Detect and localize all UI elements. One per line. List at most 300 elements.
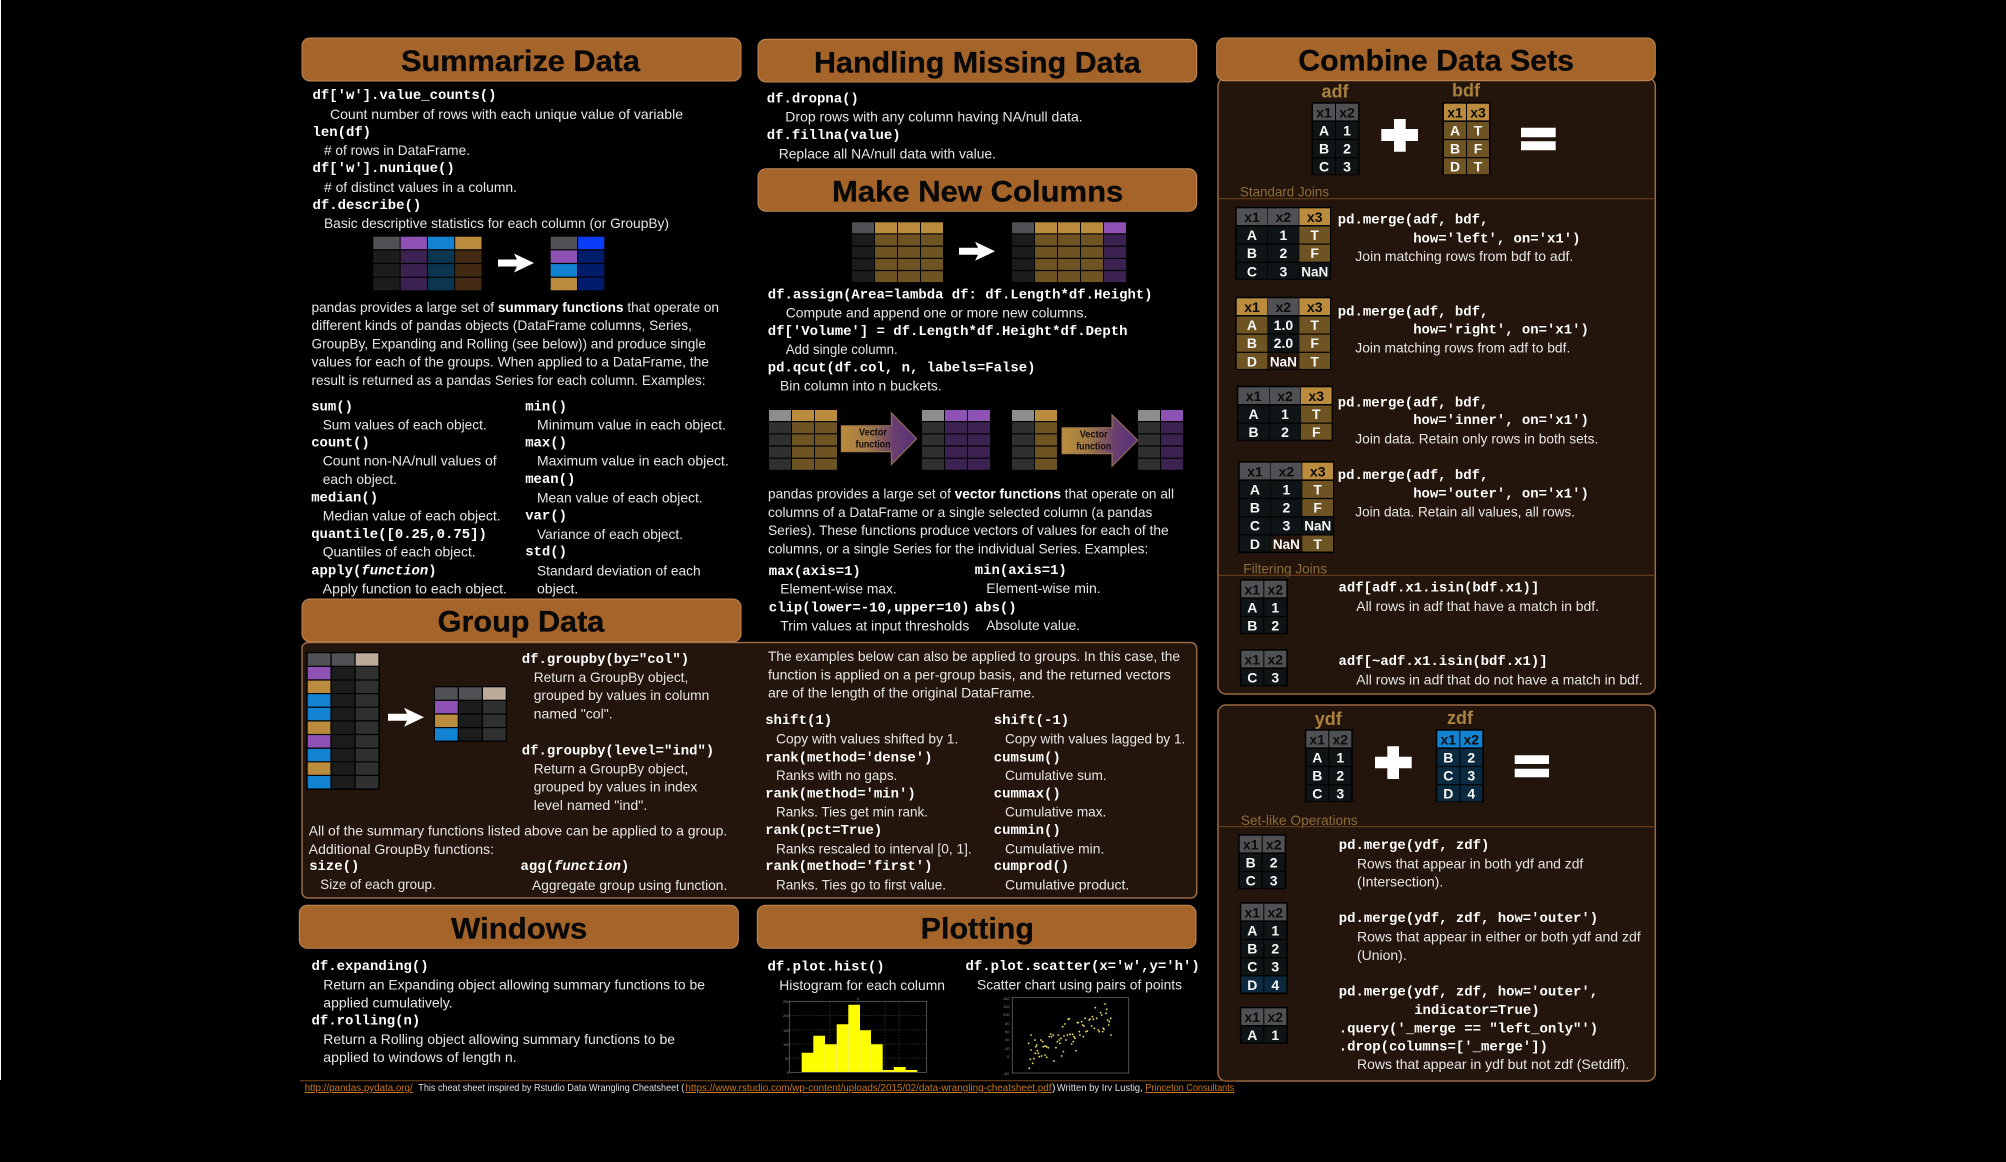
table: ydf: x1 xyxy=(1310,731,1325,747)
filter join: isin xyxy=(1240,579,1599,634)
panel: Windows xyxy=(299,905,738,1065)
table: zdf xyxy=(1436,708,1484,802)
join: outer: T xyxy=(1313,536,1322,552)
table: bdf: T xyxy=(1474,122,1483,138)
text block: shift and rank functions: shift(1) xyxy=(765,713,832,729)
heading: Plotting: Plotting xyxy=(921,912,1034,945)
join: outer: x3 xyxy=(1310,463,1326,479)
diagram: describe table transformation xyxy=(373,237,605,290)
table: zdf: zdf xyxy=(1447,708,1474,728)
text block: shift and rank functions: Copy with values shifted by 1. xyxy=(776,730,958,746)
join: left: 2 xyxy=(1280,245,1288,261)
panel: Handling Missing Data xyxy=(758,39,1197,161)
table: ydf: C xyxy=(1312,786,1322,802)
text block: window methods: applied cumulatively. xyxy=(323,994,453,1010)
text block: plot methods: Scatter chart using pairs of points xyxy=(977,977,1182,993)
table: bdf: B xyxy=(1450,140,1460,156)
join: inner: 2 xyxy=(1281,424,1289,440)
join: outer xyxy=(1238,461,1589,553)
text block: missing data methods xyxy=(767,91,1083,161)
table: ydf: 3 xyxy=(1336,786,1344,802)
table: adf: x2 xyxy=(1339,104,1355,120)
text block: plot methods xyxy=(768,959,1200,993)
set operation: intersection: x1 xyxy=(1243,836,1259,852)
text block: window methods: df.expanding() xyxy=(312,959,429,975)
panel: Plotting xyxy=(757,905,1200,1076)
heading: Group Data: Group Data xyxy=(438,606,605,639)
join: right: B xyxy=(1247,335,1257,351)
set operation: union: 1 xyxy=(1271,922,1279,938)
heading: Handling Missing Data: Handling Missing Data xyxy=(814,46,1141,79)
table: adf: 2 xyxy=(1343,140,1351,156)
text block: summary functions left column: Quantiles of each object. xyxy=(323,544,476,560)
set operation: intersection: (Intersection). xyxy=(1357,874,1443,890)
join: left: A xyxy=(1247,227,1257,243)
filter join: not isin: All rows in adf that do not have a match in bdf. xyxy=(1356,671,1643,687)
set operation: setdiff: indicator=True) xyxy=(1414,1003,1540,1019)
table: bdf: T xyxy=(1474,159,1483,175)
text block: window methods xyxy=(312,959,705,1065)
text block: window methods: Return an Expanding object allowing summary functions to be xyxy=(323,976,705,992)
text block: summary functions right column: Standard deviation of each xyxy=(537,562,701,578)
join: right: T xyxy=(1310,353,1319,369)
footer credits xyxy=(300,1081,1236,1094)
text block: additional groupby functions: Additional GroupBy functions: xyxy=(309,841,494,857)
table: ydf: 2 xyxy=(1336,768,1344,784)
text block: vector function examples: max(axis=1) xyxy=(769,564,861,580)
join: left: how='left', on='x1') xyxy=(1413,231,1580,247)
heading: Make New Columns xyxy=(758,169,1197,211)
footer credits: Written by Irv Lustig, xyxy=(1057,1082,1143,1094)
table: adf: x1 xyxy=(1316,104,1332,120)
text block: new column methods: pd.qcut(df.col, n, labels=False) xyxy=(768,360,1035,376)
table: adf: A xyxy=(1319,122,1329,138)
text block: summary functions intro: different kinds of pandas objects (DataFrame columns, Series, xyxy=(312,317,692,333)
text block: summary functions intro: result is returned as a pandas Series for each column. Examples: xyxy=(312,372,706,388)
text block: groupby methods: df.groupby(by="col") xyxy=(522,652,689,668)
set operation: setdiff xyxy=(1240,984,1629,1072)
set operation: intersection: C xyxy=(1246,873,1256,889)
filter join: not isin: adf[~adf.x1.isin(bdf.x1)] xyxy=(1338,654,1548,670)
text block: plot methods: df.plot.scatter(x='w',y='h') xyxy=(966,959,1200,975)
join: inner: x3 xyxy=(1309,388,1324,404)
text block: vector function examples: clip(lower=-10,upper=10) xyxy=(769,600,970,616)
text block: cumulative functions: Cumulative sum. xyxy=(1005,767,1107,783)
arrow: vector function: Vector xyxy=(859,427,887,439)
set operation: setdiff: Rows that appear in ydf but not zdf (Setdiff). xyxy=(1357,1056,1629,1072)
join: left: x1 xyxy=(1244,209,1260,225)
text block: vector functions intro xyxy=(768,486,1174,556)
chart: scatter plot: 80 xyxy=(1005,1021,1010,1026)
table: ydf: x2 xyxy=(1333,731,1348,747)
table: bdf: A xyxy=(1450,122,1460,138)
text block: summary functions intro: pandas provides a large set of summary functions that operate on xyxy=(312,299,719,315)
text block: vector function examples: Absolute value. xyxy=(986,617,1080,633)
filter join: isin: x1 xyxy=(1245,581,1260,597)
join: right: F xyxy=(1310,335,1319,351)
text block: cumulative functions: cummax() xyxy=(994,786,1061,802)
join: left xyxy=(1235,207,1580,280)
join: left: B xyxy=(1247,245,1257,261)
text block: new column methods: Add single column. xyxy=(786,341,898,357)
set operation: union: 4 xyxy=(1271,977,1279,993)
text block: new column methods xyxy=(768,287,1153,394)
join: outer: A xyxy=(1250,481,1260,497)
section label: Set-like Operations: Set-like Operations xyxy=(1241,812,1358,828)
chart: scatter plot: 100 xyxy=(1003,1012,1010,1017)
text block: missing data methods: Replace all NA/null data with value. xyxy=(779,145,996,161)
text block: summary functions intro: values for each of the groups. When applied to a DataFrame, the xyxy=(312,354,709,370)
text block: summary functions right column: mean() xyxy=(525,472,575,488)
footer credits: This cheat sheet inspired by Rstudio Data Wrangling Cheatsheet ( xyxy=(418,1082,685,1094)
set operation: union: x2 xyxy=(1268,904,1283,920)
text block: cumulative functions: cummin() xyxy=(994,823,1061,839)
set operation: union: x1 xyxy=(1245,904,1260,920)
set operation: union: A xyxy=(1247,922,1257,938)
filter join: not isin: x1 xyxy=(1245,651,1260,667)
chart: scatter plot: 0 xyxy=(1007,1054,1010,1059)
text block: additional groupby functions: Aggregate group using function. xyxy=(532,877,727,893)
text block: summary functions left column: apply(function) xyxy=(311,563,437,579)
join: inner: how='inner', on='x1') xyxy=(1413,413,1589,429)
join: outer: pd.merge(adf, bdf, xyxy=(1338,468,1488,484)
text block: shift and rank functions: Ranks with no gaps. xyxy=(776,767,897,783)
text block: shift and rank functions: rank(method='dense') xyxy=(765,750,932,766)
join: right: D xyxy=(1247,353,1257,369)
set operation: union: Rows that appear in either or both ydf and zdf xyxy=(1357,929,1641,945)
join: left: x2 xyxy=(1276,209,1291,225)
text block: summary functions left column: Median value of each object. xyxy=(323,507,501,523)
text block: vector function examples: Element-wise min. xyxy=(986,580,1101,596)
join: outer: x2 xyxy=(1279,463,1294,479)
footer credits: http://pandas.pydata.org/ xyxy=(305,1082,413,1094)
text block: summary functions right column: min() xyxy=(525,400,567,416)
filter join: isin: 2 xyxy=(1271,618,1279,634)
set operation: intersection: 2 xyxy=(1270,854,1278,870)
panel: Summarize Data xyxy=(302,38,741,596)
text block: summary functions right column: Variance of each object. xyxy=(537,526,683,542)
chart: scatter plot: 140 xyxy=(1003,996,1010,1001)
join: outer: D xyxy=(1250,536,1260,552)
text block: window methods: df.rolling(n) xyxy=(312,1014,420,1030)
table: zdf: x1 xyxy=(1441,731,1456,747)
text block: summary functions left column: each object. xyxy=(323,471,397,487)
filter join: not isin: 3 xyxy=(1271,669,1279,685)
join: left: C xyxy=(1247,263,1257,279)
chart: histogram xyxy=(783,996,927,1075)
text block: summarize functions list: len(df) xyxy=(312,125,371,141)
text block: groupby methods xyxy=(522,652,714,813)
table: adf xyxy=(1312,82,1360,175)
table: adf: 3 xyxy=(1343,159,1351,175)
set operation: intersection: pd.merge(ydf, zdf) xyxy=(1339,838,1489,854)
table: bdf: D xyxy=(1450,159,1460,175)
text block: new column methods: Bin column into n buckets. xyxy=(780,378,942,394)
text block: shift and rank functions: Ranks. Ties go to first value. xyxy=(776,876,946,892)
set operation: setdiff: pd.merge(ydf, zdf, how='outer', xyxy=(1339,984,1598,1000)
join: inner: 1 xyxy=(1281,406,1289,422)
text block: per-group vector intro xyxy=(768,648,1180,700)
text block: summarize functions list: # of rows in DataFrame. xyxy=(324,142,470,158)
text block: groupby methods: df.groupby(level="ind") xyxy=(522,743,714,759)
join: inner: pd.merge(adf, bdf, xyxy=(1338,395,1488,411)
heading: Combine Data Sets: Combine Data Sets xyxy=(1298,45,1574,78)
set operation: setdiff: .drop(columns=['_merge']) xyxy=(1339,1039,1548,1055)
text block: vector function examples: Element-wise max. xyxy=(780,581,897,597)
text block: new column methods: df.assign(Area=lambda df: df.Length*df.Height) xyxy=(768,287,1153,303)
filter join: isin: adf[adf.x1.isin(bdf.x1)] xyxy=(1338,581,1539,597)
join: inner: B xyxy=(1249,424,1259,440)
icon: equals xyxy=(1521,128,1556,150)
text block: summary functions right column xyxy=(525,400,729,596)
table: ydf: A xyxy=(1312,749,1322,765)
text block: cumulative functions: shift(-1) xyxy=(994,713,1069,729)
chart: scatter plot: 20 xyxy=(1005,1046,1010,1051)
join: outer: C xyxy=(1250,518,1260,534)
text block: cumulative functions: cumprod() xyxy=(994,859,1069,875)
text block: summary functions left column: Apply function to each object. xyxy=(323,580,507,596)
text block: plot methods: df.plot.hist() xyxy=(768,960,885,976)
table: zdf: 3 xyxy=(1467,768,1475,784)
table: adf: 1 xyxy=(1343,122,1351,138)
text block: vector function examples: Trim values at input thresholds xyxy=(780,618,969,634)
text block: summarize functions list: # of distinct values in a column. xyxy=(324,179,517,195)
table: ydf xyxy=(1305,709,1353,802)
heading: Windows: Windows xyxy=(451,912,587,945)
icon: plus xyxy=(1381,119,1418,152)
text block: shift and rank functions: rank(method='first') xyxy=(765,859,932,875)
join: outer: NaN xyxy=(1304,518,1331,534)
diagram: assign new column xyxy=(852,222,1126,282)
set operation: union: 2 xyxy=(1271,941,1279,957)
join: right: 2.0 xyxy=(1274,335,1293,351)
set operation: setdiff: x2 xyxy=(1268,1009,1283,1025)
join: outer: how='outer', on='x1') xyxy=(1413,486,1589,502)
set operation: setdiff: x1 xyxy=(1245,1009,1260,1025)
join: inner: Join data. Retain only rows in both sets. xyxy=(1355,430,1598,446)
text block: shift and rank functions: Ranks. Ties get min rank. xyxy=(776,804,928,820)
text block: groupby methods: named "col". xyxy=(534,706,613,722)
text block: groupby methods: Return a GroupBy object, xyxy=(534,669,688,685)
text block: summarize functions list: df['w'].nunique() xyxy=(312,161,455,177)
filter join: isin: B xyxy=(1247,618,1257,634)
table: zdf: x2 xyxy=(1464,731,1479,747)
join: inner: x1 xyxy=(1246,388,1262,404)
filter join: not isin: C xyxy=(1247,669,1257,685)
filter join: isin: x2 xyxy=(1268,581,1283,597)
chart: histogram: 250 xyxy=(783,999,790,1004)
diagram: vector functions xyxy=(769,410,1183,470)
chart: scatter plot xyxy=(1003,996,1129,1076)
chart: histogram: 0 xyxy=(787,1070,790,1075)
text block: summary functions left column: Sum values of each object. xyxy=(323,416,487,432)
text block: summary functions right column: Maximum value in each object. xyxy=(537,453,729,469)
text block: summary functions left column: quantile([0.25,0.75]) xyxy=(311,527,487,543)
text block: plot methods: Histogram for each column xyxy=(779,977,945,993)
chart: histogram: 200 xyxy=(783,1013,790,1018)
heading: Windows xyxy=(299,905,738,948)
join: left: x3 xyxy=(1307,209,1323,225)
table: adf: C xyxy=(1319,159,1329,175)
heading: Summarize Data xyxy=(302,38,741,81)
text block: new column methods: df['Volume'] = df.Length*df.Height*df.Depth xyxy=(768,324,1127,340)
footer credits: Princeton Consultants xyxy=(1145,1082,1234,1094)
text block: vector functions intro: columns of a DataFrame or a single selected column (a pandas xyxy=(768,504,1152,520)
text block: summary functions right column: var() xyxy=(525,508,567,524)
set operation: union: B xyxy=(1247,941,1257,957)
text block: per-group vector intro: are of the length of the original DataFrame. xyxy=(768,684,1035,700)
join: outer: T xyxy=(1313,481,1322,497)
text block: additional groupby functions: size() xyxy=(309,859,359,875)
join: right: x1 xyxy=(1244,299,1260,315)
join: right: how='right', on='x1') xyxy=(1413,322,1589,338)
set operation: union: pd.merge(ydf, zdf, how='outer') xyxy=(1339,911,1598,927)
join: inner: F xyxy=(1312,424,1321,440)
table: bdf: x3 xyxy=(1470,104,1486,120)
heading: Summarize Data: Summarize Data xyxy=(401,45,640,78)
diagram: groupby transformation xyxy=(306,652,507,790)
text block: summary functions intro xyxy=(312,299,719,388)
arrow: vector function single column: function xyxy=(1076,441,1111,453)
chart: scatter plot: 120 xyxy=(1003,1004,1010,1009)
chart: scatter plot: 40 xyxy=(1005,1037,1010,1042)
text block: cumulative functions: Copy with values lagged by 1. xyxy=(1005,730,1185,746)
join: right: Join matching rows from adf to bdf. xyxy=(1355,339,1570,355)
text block: summary functions intro: GroupBy, Expanding and Rolling (see below)) and produce single xyxy=(312,336,706,352)
text block: summary functions right column: std() xyxy=(525,545,567,561)
filter join: isin: All rows in adf that have a match in bdf. xyxy=(1356,598,1599,614)
join: outer: 2 xyxy=(1283,500,1291,516)
join: right: x2 xyxy=(1276,299,1291,315)
chart: histogram: 50 xyxy=(785,1056,790,1061)
footer credits: https://www.rstudio.com/wp-content/uploads/2015/02/data-wrangling-cheatsheet.pdf xyxy=(686,1082,1052,1094)
section label: Standard Joins: Standard Joins xyxy=(1240,184,1329,200)
join: inner: A xyxy=(1249,406,1259,422)
filter join: isin: 1 xyxy=(1271,599,1279,615)
text block: vector functions intro: Series). These functions produce vectors of values for each of the xyxy=(768,522,1169,538)
join: left: 3 xyxy=(1280,263,1288,279)
text block: missing data methods: Drop rows with any column having NA/null data. xyxy=(785,109,1083,125)
text block: summary functions right column: Mean value of each object. xyxy=(537,489,703,505)
text block: summarize functions list: Basic descriptive statistics for each column (or GroupBy) xyxy=(324,215,669,231)
filter join: isin: A xyxy=(1247,599,1257,615)
chart: scatter plot: 60 xyxy=(1005,1029,1010,1034)
join: outer: 3 xyxy=(1283,518,1291,534)
arrow: vector function: function xyxy=(856,439,890,451)
text block: summarize functions list: Count number of rows with each unique value of variable xyxy=(330,106,683,122)
text block: vector functions intro: columns, or a single Series for the individual Series. Examples: xyxy=(768,540,1148,556)
text block: shift and rank functions: Ranks rescaled to interval [0, 1]. xyxy=(776,840,972,856)
set operation: union: C xyxy=(1247,959,1257,975)
set operation: intersection: Rows that appear in both ydf and zdf xyxy=(1357,855,1583,871)
join: outer: x1 xyxy=(1247,463,1263,479)
join: inner xyxy=(1237,386,1598,446)
join: outer: F xyxy=(1313,500,1322,516)
set operation: union: 3 xyxy=(1271,959,1279,975)
panel: Make New Columns xyxy=(758,169,1197,634)
text block: cumulative functions: cumsum() xyxy=(994,750,1061,766)
table: ydf: B xyxy=(1312,768,1322,784)
text block: summarize functions list: df['w'].value_counts() xyxy=(312,88,497,104)
text block: groupby methods: grouped by values in index xyxy=(534,779,697,795)
text block: cumulative functions: Cumulative product. xyxy=(1005,876,1129,892)
arrow: vector function xyxy=(841,413,917,465)
chart: histogram: 100 xyxy=(783,1042,790,1047)
text block: additional groupby functions: agg(function) xyxy=(520,859,629,875)
chart: scatter plot: -40 xyxy=(1003,1071,1010,1076)
text block: missing data methods: df.dropna() xyxy=(767,91,859,107)
text block: summary functions right column: max() xyxy=(525,435,567,451)
text block: shift and rank functions: rank(pct=True) xyxy=(765,823,882,839)
text block: summarize functions list xyxy=(312,88,683,231)
text block: vector functions intro: pandas provides a large set of vector functions that operate on all xyxy=(768,486,1174,502)
text block: summarize functions list: df.describe() xyxy=(312,198,421,214)
text block: shift and rank functions: rank(method='min') xyxy=(765,786,916,802)
set operation: setdiff: A xyxy=(1247,1027,1257,1043)
arrow: vector function single column xyxy=(1062,415,1138,466)
join: outer: 1 xyxy=(1283,481,1291,497)
filter join: not isin: x2 xyxy=(1268,651,1283,667)
table: bdf: x1 xyxy=(1447,104,1463,120)
arrow: vector function single column: Vector xyxy=(1080,429,1108,441)
table: bdf xyxy=(1442,81,1490,175)
set operation: intersection xyxy=(1238,834,1583,890)
set operation: intersection: x2 xyxy=(1266,836,1282,852)
heading: Make New Columns: Make New Columns xyxy=(832,176,1123,209)
text block: window methods: applied to windows of length n. xyxy=(323,1049,517,1065)
table: zdf: D xyxy=(1443,786,1453,802)
text block: vector function examples: abs() xyxy=(975,600,1017,616)
join: outer: Join data. Retain all values, all rows. xyxy=(1355,504,1575,520)
join: inner: T xyxy=(1312,406,1321,422)
text block: cumulative functions: Cumulative min. xyxy=(1005,840,1104,856)
join: left: 1 xyxy=(1280,227,1288,243)
heading: Group Data xyxy=(302,599,741,642)
text block: cumulative functions xyxy=(994,713,1185,892)
table: adf: B xyxy=(1319,140,1329,156)
filter join: not isin xyxy=(1240,649,1643,687)
panel background xyxy=(1218,705,1655,1081)
text block: summary functions left column: Count non-NA/null values of xyxy=(323,453,497,469)
join: right xyxy=(1235,297,1589,370)
text block: new column methods: Compute and append one or more new columns. xyxy=(786,304,1087,320)
join: right: 1.0 xyxy=(1274,317,1293,333)
panel background xyxy=(302,642,1197,898)
join: right: A xyxy=(1247,317,1257,333)
join: left: Join matching rows from bdf to adf. xyxy=(1355,248,1573,264)
text block: groupby methods: level named "ind". xyxy=(534,797,647,813)
chart: histogram: h xyxy=(857,996,859,1001)
text block: groupby methods: grouped by values in column xyxy=(534,687,709,703)
join: left: F xyxy=(1310,245,1319,261)
text block: vector function examples xyxy=(769,563,1101,634)
text block: groupby methods: Return a GroupBy object, xyxy=(534,760,688,776)
set operation: intersection: B xyxy=(1246,854,1256,870)
text block: vector function examples: min(axis=1) xyxy=(975,563,1067,579)
text block: additional groupby functions: Size of each group. xyxy=(320,876,436,892)
join: left: T xyxy=(1310,227,1319,243)
set operation: union xyxy=(1240,902,1641,994)
set operation: setdiff: .query('_merge == "left_only"') xyxy=(1339,1021,1598,1037)
text block: shift and rank functions xyxy=(765,713,972,892)
table: ydf: ydf xyxy=(1315,709,1343,729)
text block: summary functions right column: Minimum value in each object. xyxy=(537,416,726,432)
set operation: intersection: 3 xyxy=(1270,873,1278,889)
text block: per-group vector intro: function is applied on a per-group basis, and the returned vectors xyxy=(768,666,1171,682)
heading: Combine Data Sets xyxy=(1217,38,1655,81)
table: zdf: 4 xyxy=(1467,786,1475,802)
table: bdf: bdf xyxy=(1452,81,1481,101)
